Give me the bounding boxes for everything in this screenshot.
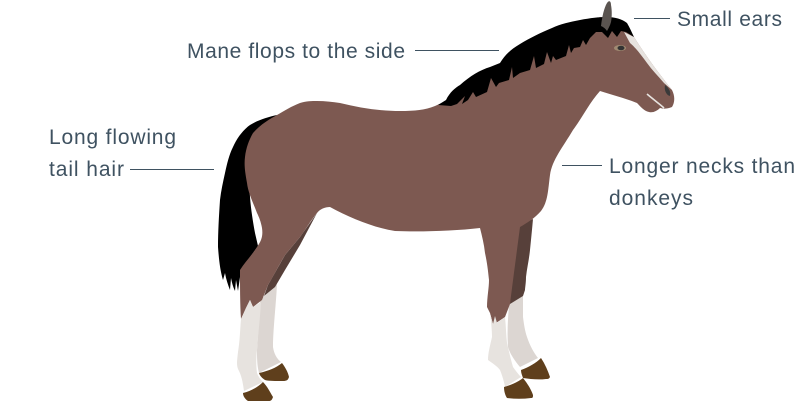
far hind leg — [257, 213, 317, 381]
callout: tail — [49, 126, 214, 181]
callout: tail: tail hair — [49, 158, 124, 181]
callout: tail: Long flowing — [49, 126, 176, 149]
callout: mane: Mane flops to the side — [187, 40, 405, 63]
mouth line — [647, 94, 664, 108]
horse illustration — [218, 1, 674, 401]
body, neck and head — [240, 17, 674, 324]
callout: neck: Longer necks than — [609, 155, 795, 178]
callout: neck — [562, 155, 795, 210]
ear — [601, 1, 612, 31]
far front leg — [508, 219, 550, 379]
eye — [614, 45, 626, 51]
mane — [438, 17, 634, 106]
callout: neck: donkeys — [609, 187, 693, 210]
near front leg — [488, 313, 533, 399]
nostril — [665, 85, 670, 96]
white blaze — [624, 32, 672, 90]
callout: small ears: Small ears — [677, 8, 782, 31]
near hind leg — [237, 300, 273, 401]
tail — [218, 115, 277, 291]
